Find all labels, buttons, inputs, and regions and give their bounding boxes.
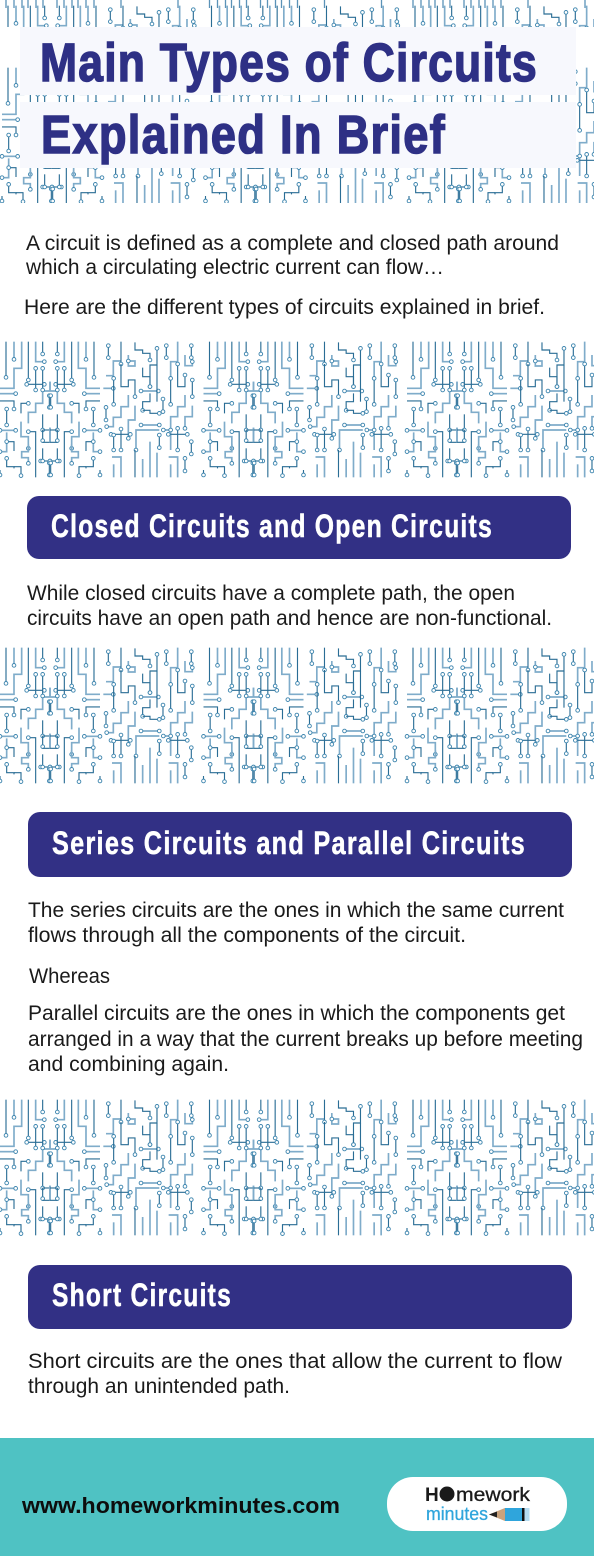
logo word: mework: mework (456, 1485, 531, 1506)
website url: www.homeworkminutes.com (21, 1493, 340, 1518)
description (28, 899, 583, 1076)
footer background (0, 1438, 594, 1556)
description: The series circuits are the ones in which the same current (28, 899, 564, 922)
intro text: Here are the different types of circuits explained in brief. (24, 296, 545, 319)
heading bar (27, 496, 571, 559)
title panel top (20, 27, 576, 95)
description: arranged in a way that the current breaks up before meeting (28, 1028, 583, 1051)
logo word: H: H (425, 1485, 439, 1506)
description: and combining again. (28, 1053, 229, 1076)
circuit pattern: title lower strip and sides (0, 68, 594, 203)
panel: series and parallel circuits (28, 812, 583, 1076)
description (28, 1350, 563, 1398)
heading bar (28, 1265, 572, 1329)
icon: pencil (489, 1508, 530, 1521)
intro text: which a circulating electric current can flow… (25, 256, 444, 279)
panel: closed and open circuits (27, 496, 571, 630)
intro text: A circuit is defined as a complete and closed path around (26, 232, 559, 255)
logo (387, 1477, 567, 1531)
intro text (24, 232, 559, 319)
heading text: Short Circuits (52, 1277, 232, 1313)
description: Whereas (29, 965, 110, 988)
logo pill (387, 1477, 567, 1531)
circuit pattern band 1 (0, 342, 594, 477)
title panel bottom (20, 102, 576, 168)
description (27, 582, 552, 630)
title banner (0, 0, 594, 203)
circuit pattern band 3 (0, 1100, 594, 1235)
description: While closed circuits have a complete path, the open (27, 582, 515, 605)
description: flows through all the components of the circuit. (28, 924, 466, 947)
footer (0, 1438, 594, 1556)
panel: short circuits (28, 1265, 572, 1398)
heading bar (28, 812, 572, 877)
description: Short circuits are the ones that allow the current to flow (28, 1350, 563, 1373)
circuit pattern: title top strip (5, 0, 594, 27)
title line 2: Explained In Brief (41, 105, 446, 165)
logo clock O (440, 1486, 454, 1502)
logo word: minutes: minutes (426, 1504, 488, 1524)
description: circuits have an open path and hence are non-functional. (27, 607, 552, 630)
circuit pattern band 2 (0, 648, 594, 783)
description: Parallel circuits are the ones in which the components get (28, 1002, 565, 1025)
description: through an unintended path. (28, 1375, 290, 1398)
